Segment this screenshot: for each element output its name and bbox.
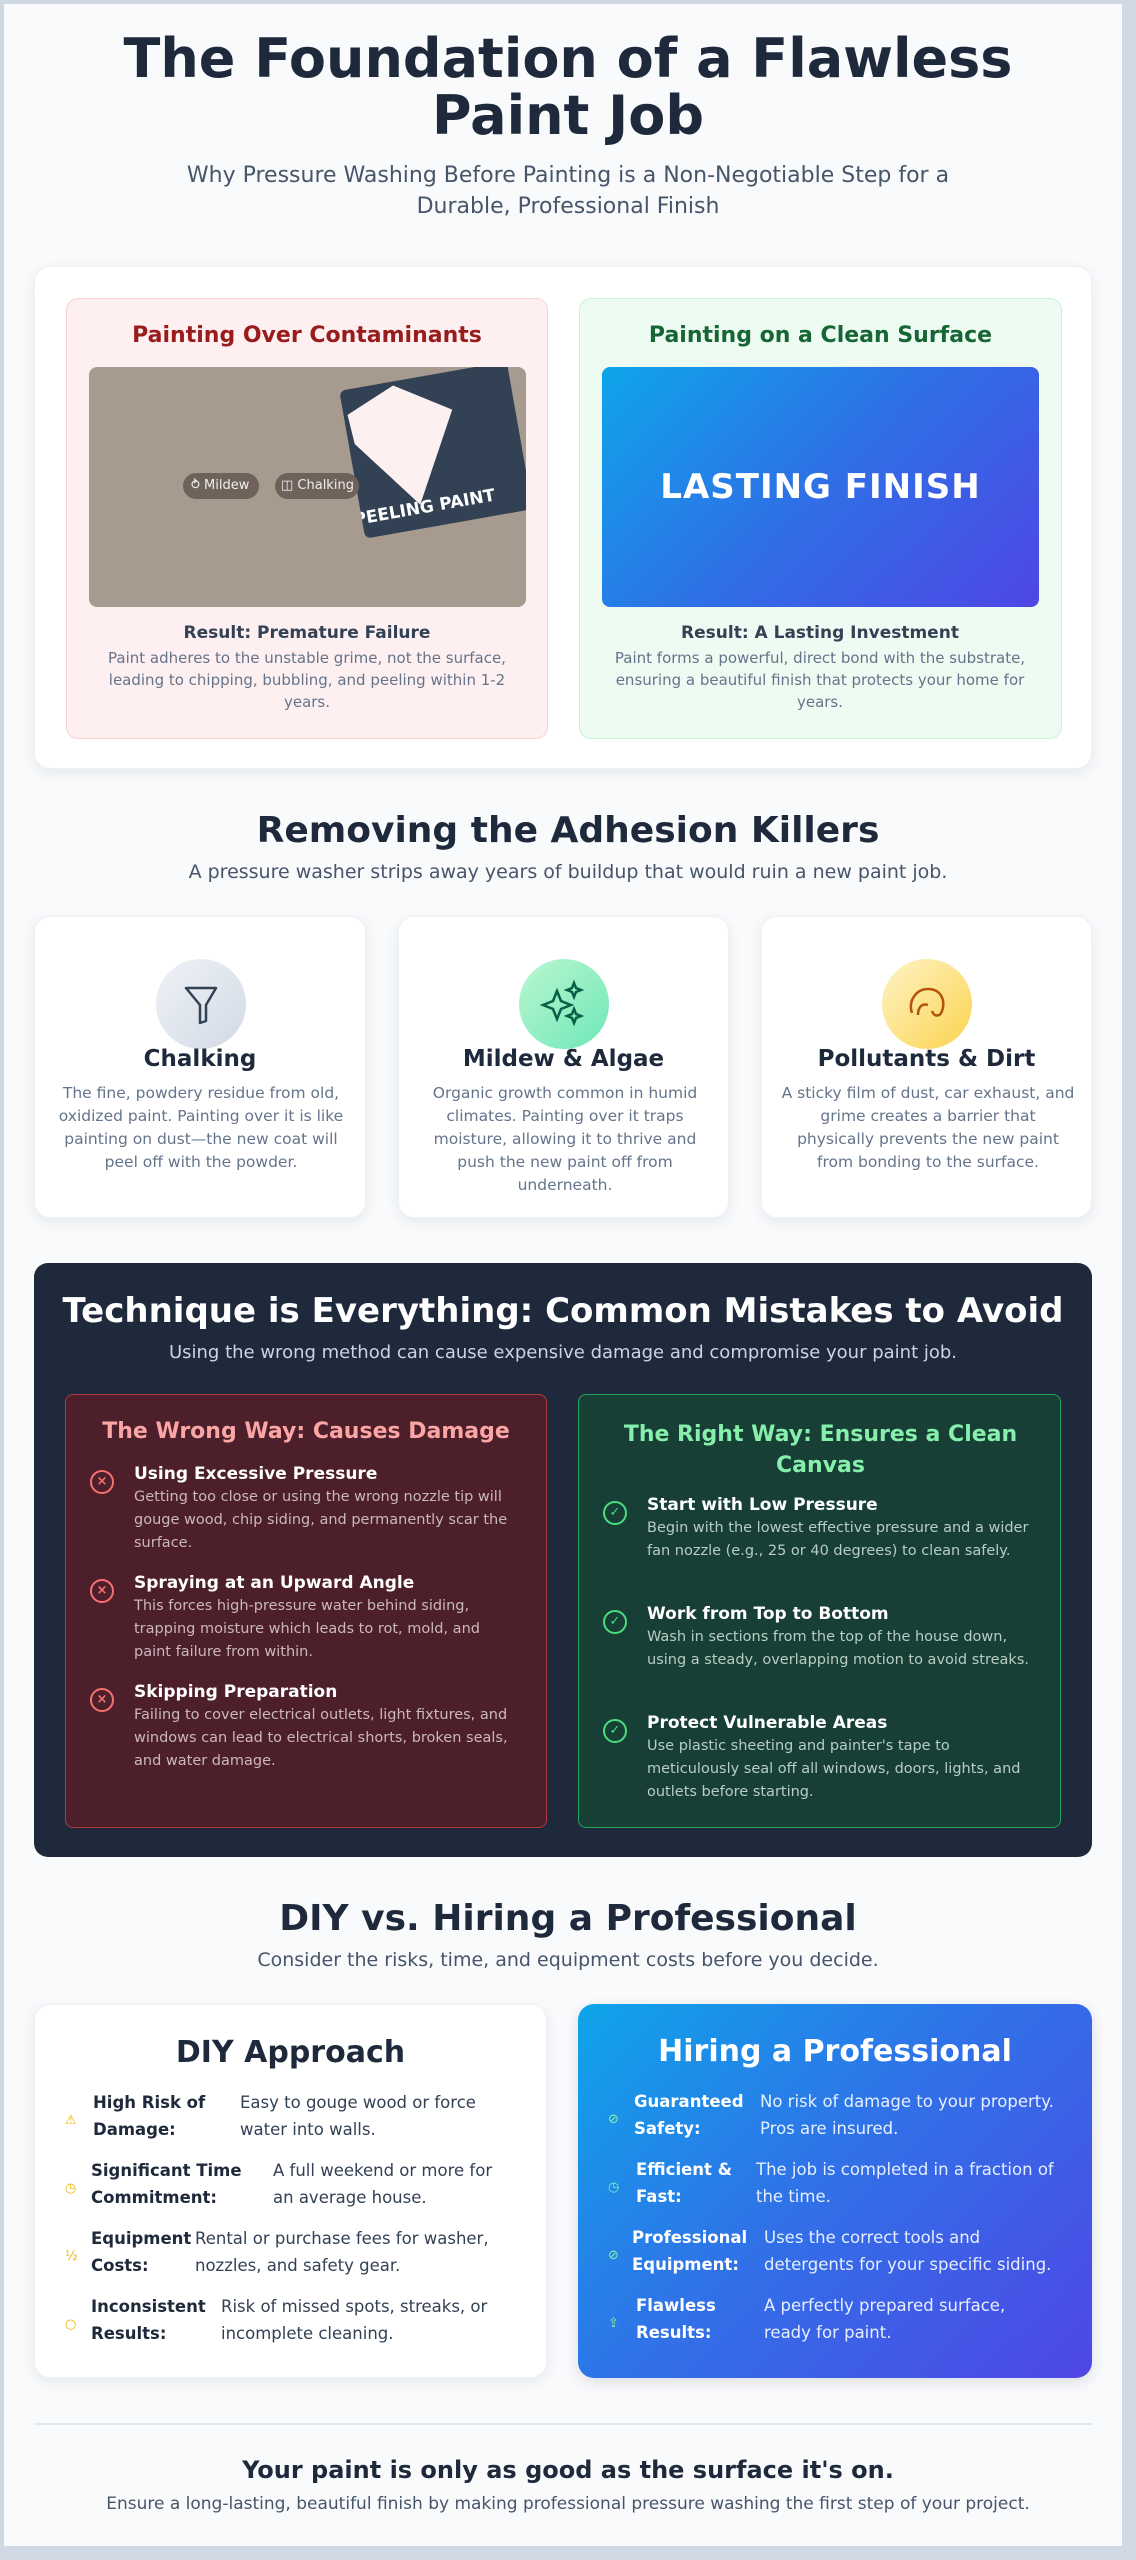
tag: chalking: ◫ Chalking — [281, 478, 354, 493]
card: professional — [578, 2004, 1092, 2378]
row: safety — [608, 2092, 1054, 2138]
card: diy: DIY Approach — [176, 2035, 405, 2070]
item: top to bottom: Work from Top to Bottom — [647, 1604, 889, 1624]
subheading: Using the wrong method can cause expensive damage and compromise your paint job. — [169, 1342, 957, 1363]
card: professional: Fast: — [636, 2187, 682, 2206]
card: diy: ⚠ — [65, 2113, 77, 2128]
card: diy: Commitment: — [91, 2188, 217, 2207]
card: professional: The job is completed in a fraction of — [756, 2160, 1054, 2179]
card: professional: Uses the correct tools and — [764, 2228, 980, 2247]
footer text: Ensure a long-lasting, beautiful finish by making professional pressure washing the first step of your project. — [106, 2494, 1030, 2514]
card: professional: A perfectly prepared surface, — [764, 2296, 1005, 2315]
footer heading: Your paint is only as good as the surface it's on. — [242, 2456, 894, 2484]
card: pollutants: Pollutants & Dirt — [818, 1046, 1035, 1072]
row: fast — [608, 2160, 1054, 2206]
heading: clean: Painting on a Clean Surface — [649, 323, 992, 348]
item: low pressure — [603, 1495, 1028, 1559]
card: professional: ⊘ — [608, 2248, 619, 2263]
title: Paint Job — [432, 84, 704, 147]
item: upward angle: Spraying at an Upward Angle — [134, 1573, 414, 1593]
card: professional: ◷ — [608, 2180, 619, 2195]
item: top to bottom: ✓ — [610, 1614, 620, 1629]
tag: chalking — [275, 473, 359, 499]
card: pollutants: A sticky film of dust, car exhaust, and grime creates a barrier that physically prevents the new paint from bonding to the surface. — [782, 1084, 1074, 1171]
panel: technique — [34, 1263, 1092, 1857]
item: skipping prep: Skipping Preparation — [134, 1682, 337, 1702]
card: diy: an average house. — [273, 2188, 427, 2207]
card: professional: Safety: — [634, 2119, 701, 2138]
item: skipping prep: × — [97, 1692, 107, 1707]
item: top to bottom: Wash in sections from the top of the house down, using a steady, overlapping motion to avoid streaks. — [647, 1629, 1029, 1668]
card: diy: Equipment — [91, 2229, 191, 2248]
item: excessive pressure — [90, 1464, 507, 1551]
row: flawless — [608, 2296, 1005, 2342]
card: professional: Flawless — [636, 2296, 716, 2315]
icon: sparkles — [519, 959, 609, 1049]
heading: contaminants: Painting Over Contaminants — [132, 323, 482, 348]
panel: clean surface — [579, 298, 1062, 739]
result: investment: Result: A Lasting Investment — [681, 623, 959, 643]
card: diy: Significant Time — [91, 2161, 242, 2180]
tag: mildew — [183, 473, 259, 499]
item: protect areas: ✓ — [610, 1723, 620, 1738]
item: protect areas — [603, 1713, 1020, 1800]
subheading: Consider the risks, time, and equipment costs before you decide. — [257, 1949, 879, 1971]
tag: mildew: ⥁ Mildew — [191, 478, 249, 493]
panel: comparison — [34, 266, 1092, 769]
card: professional: Pros are insured. — [760, 2119, 898, 2138]
heading: adhesion killers: Removing the Adhesion Killers — [257, 810, 879, 851]
heading: diy vs pro: DIY vs. Hiring a Professional — [279, 1898, 857, 1939]
panel: right way — [578, 1394, 1061, 1828]
card: diy: Damage: — [93, 2120, 176, 2139]
card: professional: Guaranteed — [634, 2092, 744, 2111]
card: diy: A full weekend or more for — [273, 2161, 492, 2180]
card: diy: Risk of missed spots, streaks, or — [221, 2297, 487, 2316]
card: professional: ⇪ — [608, 2316, 619, 2331]
item: protect areas: Protect Vulnerable Areas — [647, 1713, 887, 1733]
title: The Foundation of a Flawless — [124, 27, 1012, 90]
card: chalking: The fine, powdery residue from old, oxidized paint. Painting over it is like painting on dust—the new coat will peel off with the powder. — [59, 1084, 343, 1171]
image: lasting finish — [602, 367, 1039, 607]
image: lasting finish: LASTING FINISH — [660, 467, 981, 507]
card: diy: nozzles, and safety gear. — [195, 2256, 400, 2275]
item: low pressure: ✓ — [610, 1505, 620, 1520]
panel: right way: The Right Way: Ensures a Clean Canvas — [624, 1422, 1017, 1478]
item: upward angle: This forces high-pressure water behind siding, trapping moisture which leads to rot, mold, and paint failure from within. — [134, 1598, 480, 1660]
image: peeling paint: PEELING PAINT — [352, 486, 497, 530]
item: skipping prep — [90, 1682, 508, 1769]
card: diy — [34, 2004, 547, 2378]
panel: wrong way: The Wrong Way: Causes Damage — [102, 1419, 510, 1444]
card: diy: ½ — [65, 2249, 78, 2264]
subheading: A pressure washer strips away years of buildup that would ruin a new paint job. — [189, 861, 947, 883]
card: diy: Rental or purchase fees for washer, — [195, 2229, 489, 2248]
card: chalking: Chalking — [144, 1046, 256, 1072]
panel: wrong way — [65, 1394, 547, 1828]
card: professional: the time. — [756, 2187, 831, 2206]
heading: technique: Technique is Everything: Common Mistakes to Avoid — [62, 1291, 1063, 1331]
row: results — [65, 2297, 488, 2343]
item: low pressure: Start with Low Pressure — [647, 1495, 878, 1515]
item: low pressure: Begin with the lowest effective pressure and a wider fan nozzle (e.g., 25 or 40 degrees) to clean safely. — [647, 1520, 1028, 1559]
card: professional: Professional — [632, 2228, 747, 2247]
icon: funnel — [156, 959, 246, 1049]
card: diy: Costs: — [91, 2256, 149, 2275]
card: professional: Results: — [636, 2323, 711, 2342]
card: diy: ◷ — [65, 2181, 76, 2196]
row: time — [65, 2161, 492, 2207]
card: mildew — [398, 916, 729, 1218]
card: professional: ⊘ — [608, 2112, 619, 2127]
item: excessive pressure: Getting too close or using the wrong nozzle tip will gouge wood, chip siding, and permanently scar the surface. — [134, 1489, 507, 1551]
row: equipment — [608, 2228, 1051, 2274]
item: excessive pressure: × — [97, 1474, 107, 1489]
row: equipment — [65, 2229, 489, 2275]
item: protect areas: Use plastic sheeting and painter's tape to meticulously seal off all windows, doors, lights, and outlets before starting. — [647, 1738, 1020, 1800]
item: excessive pressure: Using Excessive Pressure — [134, 1464, 377, 1484]
icon: dirt — [882, 959, 972, 1049]
item: upward angle — [90, 1573, 480, 1660]
panel: contaminants — [66, 298, 548, 739]
card: chalking — [34, 916, 366, 1218]
row: risk — [65, 2093, 476, 2139]
item: top to bottom — [603, 1604, 1029, 1668]
card: professional: Equipment: — [632, 2255, 739, 2274]
card: professional: detergents for your specific siding. — [764, 2255, 1051, 2274]
card: professional: ready for paint. — [764, 2323, 891, 2342]
card: diy: Results: — [91, 2324, 166, 2343]
result: failure: Result: Premature Failure — [184, 623, 430, 643]
card: mildew: Mildew & Algae — [463, 1046, 664, 1072]
card: diy: Inconsistent — [91, 2297, 206, 2316]
image: peeling paint — [89, 367, 526, 607]
item: skipping prep: Failing to cover electrical outlets, light fixtures, and windows can lead to electrical shorts, broken seals, and water damage. — [134, 1707, 508, 1769]
card: professional: No risk of damage to your property. — [760, 2092, 1054, 2111]
card: professional: Hiring a Professional — [658, 2034, 1012, 2069]
title — [124, 27, 1012, 147]
result: failure: Paint adheres to the unstable grime, not the surface, leading to chipping, bubbling, and peeling within 1-2 years. — [108, 649, 506, 711]
result: investment: Paint forms a powerful, direct bond with the substrate, ensuring a beautiful finish that protects your home for years. — [615, 649, 1025, 711]
item: upward angle: × — [97, 1583, 107, 1598]
card: diy: incomplete cleaning. — [221, 2324, 394, 2343]
subtitle: Why Pressure Washing Before Painting is a Non-Negotiable Step for a Durable, Professional Finish — [187, 163, 949, 219]
card: professional: Efficient & — [636, 2160, 732, 2179]
card: diy: High Risk of — [93, 2093, 205, 2112]
card: diy: ○ — [65, 2317, 76, 2332]
card: pollutants — [761, 916, 1092, 1218]
card: diy: Easy to gouge wood or force — [240, 2093, 476, 2112]
card: diy: water into walls. — [240, 2120, 376, 2139]
card: mildew: Organic growth common in humid climates. Painting over it traps moisture, allowing it to thrive and push the new paint off from underneath. — [433, 1084, 697, 1194]
